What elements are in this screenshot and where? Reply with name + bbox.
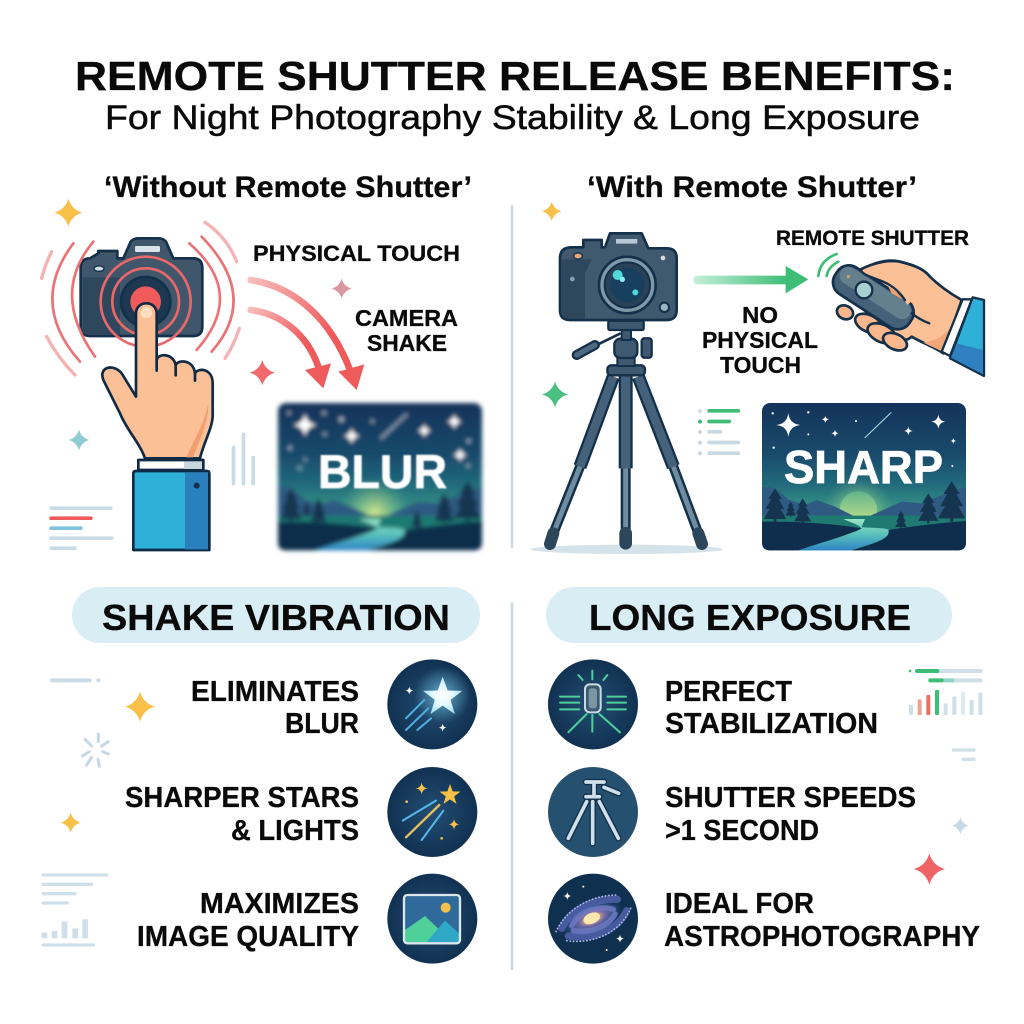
text: shutter speeds over one second	[665, 782, 916, 847]
text: maximizes image quality: IMAGE QUALITY	[137, 921, 359, 953]
image: sharp night scene	[762, 403, 966, 550]
text: perfect stabilization	[665, 676, 878, 740]
text: maximizes image quality	[137, 888, 359, 953]
title: REMOTE SHUTTER RELEASE BENEFITS:	[75, 53, 955, 99]
image: blurred night scene	[278, 403, 482, 550]
text: eliminates blur	[191, 676, 359, 740]
icon: hand holding remote	[818, 254, 984, 376]
vibration arcs	[42, 222, 239, 375]
pill heading: long exposure: LONG EXPOSURE	[589, 597, 911, 638]
decorative sparkles	[54, 199, 352, 450]
label: physical touch: PHYSICAL TOUCH	[253, 241, 460, 266]
text: ideal for astrophotography	[664, 888, 980, 953]
text: eliminates blur: ELIMINATES	[191, 676, 359, 708]
icon: tripod	[548, 767, 638, 857]
icon: tripod	[550, 321, 702, 544]
decorations: left margin	[42, 678, 155, 947]
decorative sparkles	[542, 202, 568, 407]
icon: landscape picture	[387, 874, 477, 964]
decorative side lines	[49, 433, 255, 550]
label: no physical touch: NO	[742, 302, 778, 328]
subtitle: For Night Photography Stability & Long Exposure	[105, 99, 920, 137]
text: sharper stars and lights: SHARPER STARS	[125, 782, 359, 814]
icon: stabilization	[548, 659, 638, 749]
text: maximizes image quality: MAXIMIZES	[200, 888, 359, 920]
label: camera shake: CAMERA	[355, 305, 458, 331]
label: BLUR: BLUR	[318, 445, 447, 498]
text: ideal for astrophotography: IDEAL FOR	[665, 888, 814, 920]
tripod shadow	[531, 545, 723, 554]
panel: with remote shutter illustration	[531, 202, 808, 554]
heading: without remote shutter: ‘Without Remote Shutter’	[104, 171, 472, 204]
pill heading: shake vibration	[72, 587, 480, 643]
pill heading: shake vibration: SHAKE VIBRATION	[102, 597, 450, 638]
icons and decorations	[548, 659, 983, 964]
icon: shining star	[387, 659, 477, 749]
decorations: right margin	[909, 669, 983, 885]
panel: long exposure benefits	[548, 659, 983, 964]
panel: without remote shutter illustration	[42, 199, 364, 550]
arrow: wireless signal	[693, 266, 808, 293]
text: sharper stars and lights	[125, 782, 359, 847]
panel: shake vibration benefits	[42, 659, 477, 964]
label: no physical touch: TOUCH	[720, 352, 801, 378]
label: camera shake: SHAKE	[367, 330, 447, 356]
icon: camera on tripod	[560, 233, 677, 320]
text: sharper stars and lights: & LIGHTS	[231, 815, 359, 847]
label: SHARP: SHARP	[784, 441, 943, 493]
text: perfect stabilization: PERFECT	[665, 676, 792, 708]
text: shutter speeds over one second: >1 SECOND	[665, 815, 819, 847]
label: no physical touch	[702, 302, 818, 378]
icon: camera being touched	[81, 238, 202, 347]
heading: with remote shutter: ‘With Remote Shutter’	[587, 171, 917, 204]
text: eliminates blur: BLUR	[285, 708, 359, 740]
text: shutter speeds over one second: SHUTTER SPEEDS	[665, 782, 916, 814]
decorative legend lines	[698, 409, 740, 455]
pill heading: long exposure	[546, 587, 952, 643]
label: camera shake	[355, 305, 458, 356]
text: ideal for astrophotography: ASTROPHOTOGRAPHY	[664, 921, 980, 953]
text: perfect stabilization: STABILIZATION	[665, 708, 878, 740]
icons and decorations	[42, 659, 477, 964]
icon: shooting stars	[387, 767, 477, 857]
icon: pointing hand	[102, 303, 213, 550]
icon: galaxy	[548, 874, 638, 964]
label: no physical touch: PHYSICAL	[702, 327, 818, 353]
arrows: camera shake	[251, 280, 364, 390]
label: remote shutter: REMOTE SHUTTER	[776, 227, 969, 250]
